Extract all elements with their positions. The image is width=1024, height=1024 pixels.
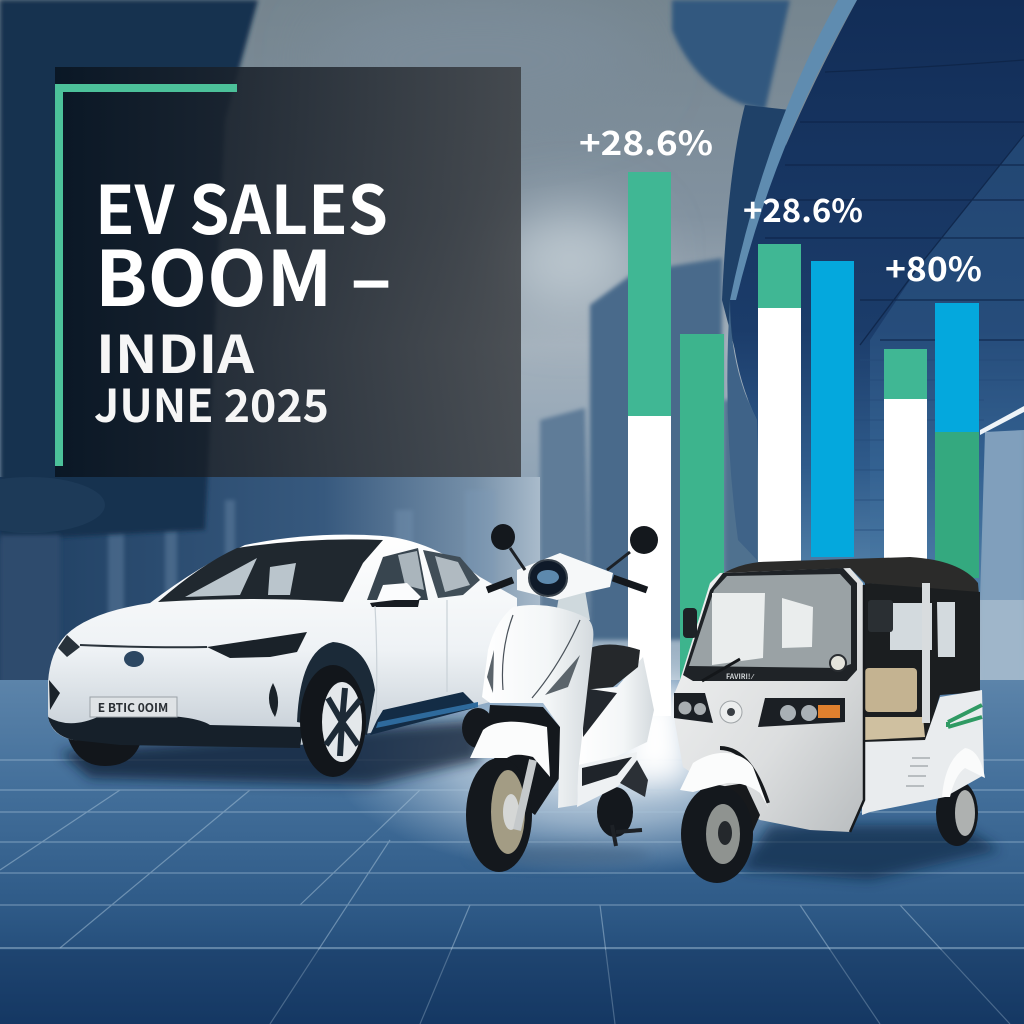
accent: green corner bracket [59, 88, 237, 466]
car: windshield highlights [185, 558, 296, 597]
scooter: front fender [470, 722, 550, 777]
icon: electric auto rickshaw [673, 557, 1000, 883]
rickshaw: front body [673, 568, 863, 832]
background: right curved canopy [672, 0, 1024, 600]
rickshaw: rear windows [890, 602, 955, 657]
car: plate text: E BTIC 0OIM [98, 699, 168, 716]
car: hood line [80, 645, 207, 647]
bar group: second [758, 244, 854, 562]
glow below the white bar [625, 690, 685, 780]
background: city sky [0, 0, 1024, 720]
rickshaw: cabin interior [865, 583, 980, 745]
label: +80%: +80% [885, 243, 982, 291]
rickshaw: badge text: FAVIRI! ⁄ [726, 672, 755, 682]
rickshaw: right lights [758, 698, 845, 727]
rickshaw: side body [862, 690, 984, 815]
rickshaw: right mirror [868, 600, 893, 632]
scooter: front shield [482, 605, 593, 808]
scooter: rear wheel [597, 787, 633, 837]
car: mirror [370, 583, 421, 607]
car: front vents [49, 680, 278, 717]
bar group: third [884, 303, 979, 578]
rickshaw: front fender [680, 753, 768, 807]
car: door lines [375, 600, 447, 715]
car: rear far tyre [462, 708, 494, 748]
scooter: rear dark housing [620, 760, 648, 797]
rickshaw: left lights [674, 693, 713, 723]
rickshaw: rear fender [942, 748, 985, 797]
scooter: rear body [578, 657, 654, 775]
rickshaw: windshield glass [689, 574, 851, 668]
rickshaw: fender arc [720, 748, 768, 803]
car: side window front [367, 548, 428, 600]
car: side window rear [423, 550, 480, 598]
car: main headlight [207, 632, 307, 658]
scooter: mirrors [491, 524, 658, 554]
scooter: handlebar grips [487, 578, 647, 590]
rickshaw: rear wheel [936, 780, 978, 846]
rickshaw: small lamp [830, 655, 846, 671]
car: rear window highlight [435, 556, 470, 592]
scooter: mirror stems [510, 548, 630, 570]
subheading: date: JUNE 2025 [94, 370, 329, 435]
scooter: dark front arch [488, 705, 560, 815]
rickshaw: roof [710, 557, 979, 595]
scooter: shield seams [502, 615, 580, 698]
car: body [48, 535, 517, 745]
rickshaw: front tyre [681, 783, 760, 883]
rickshaw: left mirror [683, 608, 697, 638]
rickshaw: seat back [865, 668, 917, 712]
rickshaw: windshield frame [683, 568, 857, 681]
scooter: front wheel [466, 758, 533, 872]
heading line 2: BOOM – [95, 218, 392, 328]
rickshaw: wiper [702, 659, 740, 681]
car: front window highlight [398, 551, 424, 590]
background: lower left blue city [0, 477, 540, 690]
car: lower grille and bumper [48, 715, 303, 748]
rickshaw: glass highlights [712, 593, 813, 665]
rickshaw: seat cushion [865, 717, 925, 740]
icon: white electric car [48, 535, 517, 785]
scooter: footboard [577, 752, 637, 807]
heading: EV Sales Boom: EV SALES [95, 157, 388, 254]
label: +28.6% second: +28.6% [743, 186, 863, 232]
scooter: indicator lights [487, 650, 580, 695]
scooter: seat [583, 644, 640, 690]
bar chart: growth [579, 117, 982, 780]
rickshaw: green decal [948, 705, 982, 727]
scooter: ground shadow [470, 845, 650, 865]
car: ground shadow [60, 720, 480, 785]
car: side sill [370, 692, 478, 735]
floor [0, 645, 1024, 1024]
background: distant towers [540, 258, 1024, 690]
car: logo [124, 651, 144, 667]
bar group: first [628, 172, 724, 716]
icon: white scooter [466, 524, 658, 872]
label: +28.6% first: +28.6% [579, 117, 713, 165]
rickshaw: door edge [850, 585, 864, 832]
car: plate [90, 697, 177, 717]
scooter: under-seat panel [583, 688, 617, 737]
scooter: neck [555, 590, 590, 620]
rickshaw: vents [906, 758, 930, 786]
rickshaw: badge [720, 701, 742, 723]
rickshaw: pillar [922, 583, 930, 723]
car: main wheel [297, 642, 375, 777]
car: windshield [158, 539, 383, 602]
subheading: India: INDIA [96, 313, 255, 388]
scooter: cowl [517, 553, 613, 600]
panel: title [55, 67, 521, 477]
car: left headlight [58, 635, 80, 657]
rickshaw: ground shadow [740, 825, 1000, 880]
scooter: stand [612, 825, 642, 846]
background: left dark building [0, 0, 258, 695]
scooter: display [529, 560, 567, 596]
car: front far tyre [68, 738, 142, 766]
